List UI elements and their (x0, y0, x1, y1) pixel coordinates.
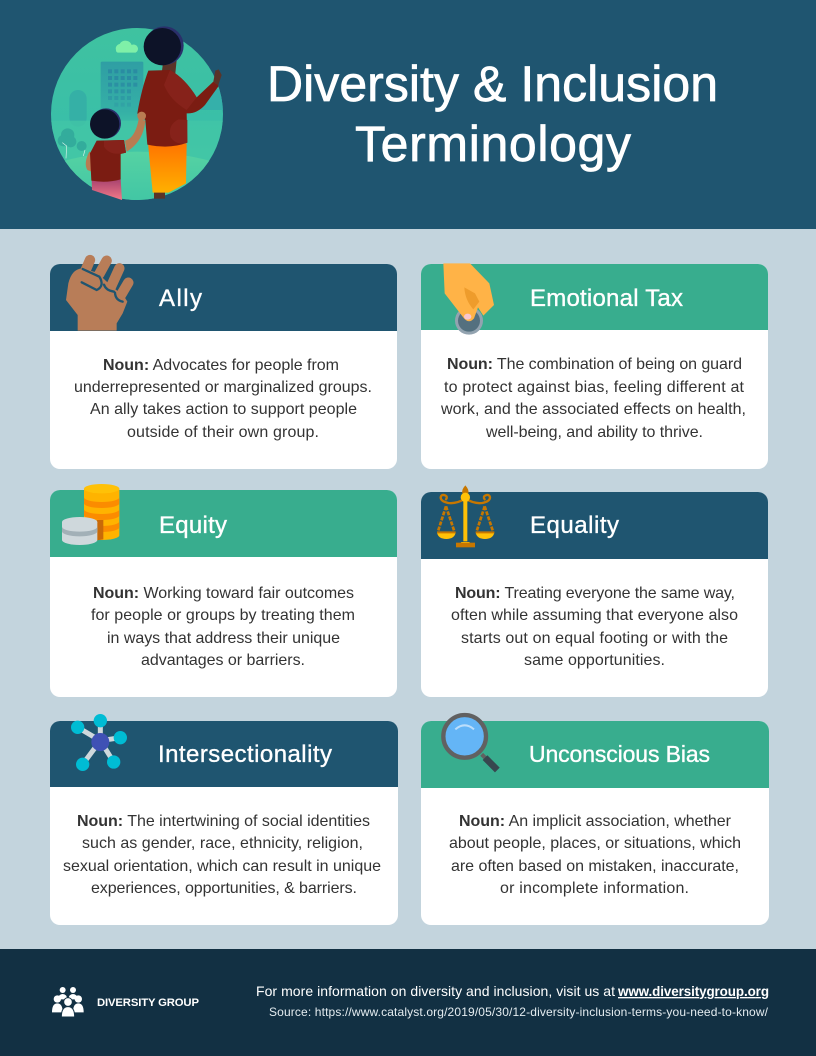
text: Intersectionality definition: Noun: The intertwining of social identities (77, 813, 370, 830)
text: Equity definition: advantages or barriers. (141, 652, 305, 669)
logo text: DIVERSITY GROUP (97, 997, 199, 1009)
text: Equality definition: starts out on equal footing or with the (461, 630, 728, 647)
text: Intersectionality definition (63, 813, 381, 897)
text: Intersectionality definition: such as gender, race, ethnicity, religion, (82, 835, 363, 852)
text: Ally definition: underrepresented or marginalized groups. (74, 379, 372, 396)
title: Diversity & Inclusion (267, 56, 718, 112)
text: Emotional Tax definition (440, 356, 746, 441)
text: Intersectionality definition: sexual orientation, which can result in unique (63, 858, 381, 875)
text: Equality definition: same opportunities. (524, 652, 665, 669)
text: Equity definition (91, 585, 355, 669)
text: Equality definition: often while assuming that everyone also (451, 607, 738, 624)
footer (0, 949, 816, 1056)
text: Ally definition: An ally takes action to support people (90, 401, 357, 418)
panel: Ally (50, 260, 397, 469)
text: Equality definition: Noun: Treating everyone the same way, (455, 585, 735, 602)
panel: Intersectionality (50, 714, 398, 925)
heading: Equality: Equality (530, 512, 619, 539)
panel: Equality (421, 485, 768, 697)
icon: coin stacks (62, 484, 119, 545)
icon: raised fist (66, 260, 128, 331)
icon: hand holding coin (443, 263, 494, 335)
heading: Equity: Equity (159, 512, 227, 539)
text: Unconscious Bias definition: Noun: An implicit association, whether (459, 813, 732, 830)
text: Unconscious Bias definition: or incomplete information. (500, 880, 689, 897)
title (267, 56, 718, 172)
icon: magnifying glass (443, 715, 497, 770)
text: Equality definition (451, 585, 738, 669)
icon: balance scales (437, 485, 494, 547)
heading: Emotional Tax: Emotional Tax (530, 285, 683, 312)
text: Emotional Tax definition: to protect against bias, feeling different at (444, 379, 745, 396)
text: Emotional Tax definition: work, and the associated effects on health, (440, 401, 746, 418)
panel: Emotional Tax (421, 263, 768, 469)
source text: Source: https://www.catalyst.org/2019/05/30/12-diversity-inclusion-terms-you-need-to-know/ (269, 1005, 769, 1019)
text: Equity definition: for people or groups by treating them (91, 607, 355, 624)
text: Ally definition (74, 357, 372, 441)
call to action text: For more information on diversity and inclusion, visit us at (256, 983, 615, 999)
text: Unconscious Bias definition: are often based on mistaken, inaccurate, (451, 858, 739, 875)
icon: group of people logo (52, 987, 84, 1017)
illustration: adult and child holding hands (51, 26, 223, 200)
text: Intersectionality definition: experiences, opportunities, & barriers. (91, 880, 357, 897)
text: Emotional Tax definition: Noun: The combination of being on guard (447, 356, 742, 373)
adult (154, 192, 165, 199)
website link text: www.diversitygroup.org (617, 984, 769, 999)
text: Unconscious Bias definition: about people, places, or situations, which (449, 835, 741, 852)
text: Ally definition: outside of their own group. (127, 424, 319, 441)
heading: Unconscious Bias: Unconscious Bias (529, 741, 710, 767)
child (92, 179, 122, 200)
icon: network nodes (71, 714, 127, 771)
text: Emotional Tax definition: well-being, and ability to thrive. (485, 424, 703, 441)
panel: Equity (50, 484, 397, 697)
text: Equity definition: in ways that address their unique (107, 630, 340, 647)
panel: Unconscious Bias (421, 715, 769, 925)
heading: Ally: Ally (159, 285, 202, 312)
text: Equity definition: Noun: Working toward fair outcomes (93, 585, 354, 602)
text: Unconscious Bias definition (449, 813, 741, 897)
heading: Intersectionality: Intersectionality (158, 741, 332, 768)
header band (0, 0, 816, 242)
text: Ally definition: Noun: Advocates for people from (103, 357, 339, 374)
title: Terminology (355, 116, 631, 172)
